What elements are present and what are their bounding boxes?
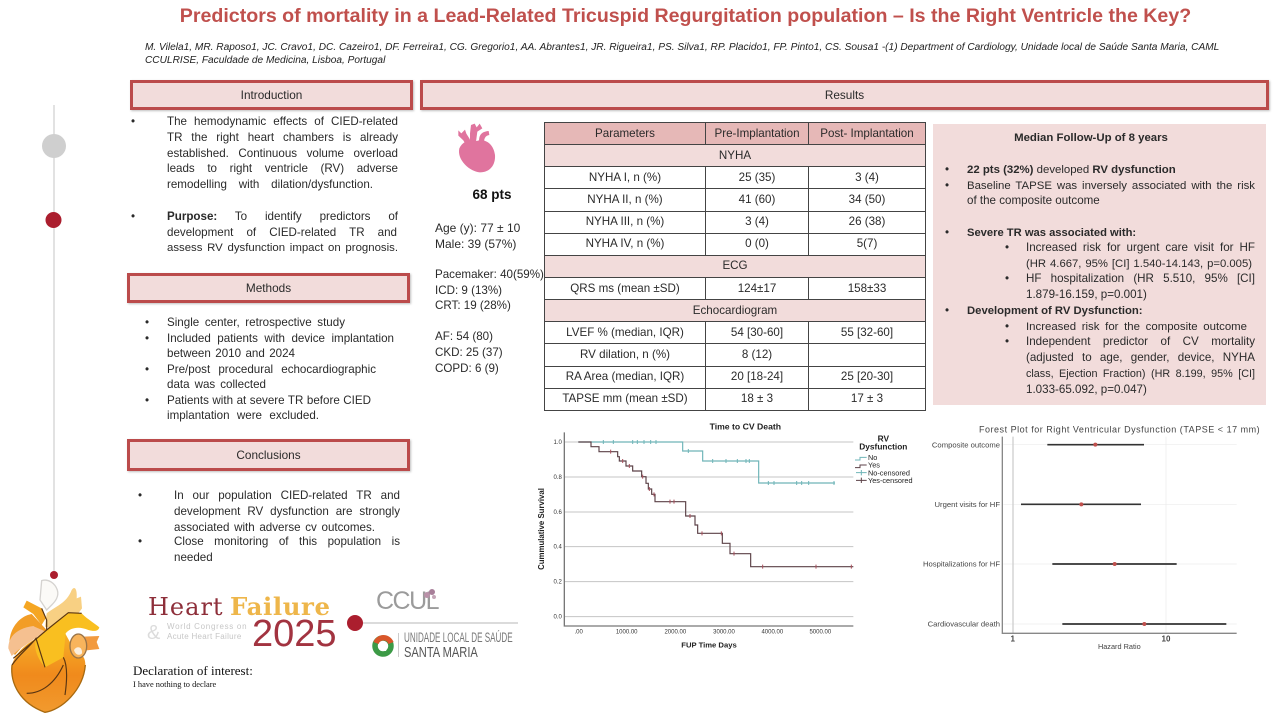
panel: baseline characteristics: Male: 39 (57%) [435,237,516,251]
panel: methods text: • [145,363,149,376]
panel: follow-up findings: Independent predictor of CV mortality [1026,335,1255,348]
y axis labels: 0.8 [553,475,562,481]
logo divider with node [347,615,518,631]
table: parameters before and after implantation: NYHA [719,149,751,162]
logo: Unidade Local de Saude Santa Maria [372,630,513,661]
table: parameters before and after implantation: 3 (4) [745,215,769,228]
x axis labels: 5000.00 [809,629,832,635]
panel: introduction text: The hemodynamic effects of CIED-related [167,115,398,128]
panel: introduction text [131,115,398,254]
panel: methods text: implantation were excluded. [167,409,319,422]
logo: Heart Failure 2025: Acute Heart Failure [167,632,242,641]
patient count: 68 pts [472,187,512,202]
logo: Heart Failure 2025: 2025 [252,613,337,655]
heading: Methods: Methods [246,281,291,295]
panel: conclusions text: development RV dysfunction are strongly [174,505,400,518]
panel: baseline characteristics: Age (y): 77 ± 10 [435,221,520,235]
y axis labels: 0.6 [553,510,562,516]
panel: follow-up findings: Increased risk for urgent care visit for HF [1026,241,1255,254]
panel: follow-up findings: Severe TR was associated with: [967,227,1136,239]
table: parameters before and after implantation: 26 (38) [849,215,885,228]
x axis labels: .00 [574,629,583,635]
table: parameters before and after implantation: 20 [18-24] [731,370,783,383]
panel: methods text: • [145,332,149,345]
x axis labels [574,629,832,635]
table: parameters before and after implantation: TAPSE mm (mean ±SD) [562,392,688,405]
panel: introduction text: • [131,210,135,223]
table: parameters before and after implantation [544,122,926,411]
panel: follow-up findings: • [1005,241,1009,254]
panel: follow-up findings: (adjusted to age, gender, device, NYHA [1026,351,1255,364]
table: parameters before and after implantation: Parameters [595,127,655,140]
icon: pink heart [458,124,496,172]
heading: Methods [127,273,410,303]
panel: follow-up findings [933,124,1266,405]
table: parameters before and after implantation: 55 [32-60] [841,326,893,339]
y axis labels: 0.4 [553,545,562,551]
chart title: Time to CV Death [710,421,781,431]
table: parameters before and after implantation: LVEF % (median, IQR) [566,326,684,339]
table: parameters before and after implantation: 124±17 [738,282,776,295]
panel: baseline characteristics: CKD: 25 (37) [435,346,503,359]
authors and affiliations: CCULRISE, Faculdade de Medicina, Lisboa, Portugal [145,55,385,66]
panel: baseline characteristics: ICD: 9 (13%) [435,284,502,297]
x axis title: FUP Time Days [681,641,737,650]
legend: No-censored [868,468,910,477]
row: composite outcome [932,440,1144,449]
y axis labels [553,440,562,621]
panel: introduction text: remodelling with dilation/dysfunction. [167,178,373,191]
declaration of interest: Declaration of interest: [133,663,253,678]
panel: follow-up findings: Development of RV Dysfunction: [967,305,1143,317]
panel: conclusions text: In our population CIED-related TR and [174,489,400,502]
logo: Heart Failure 2025: Heart [148,593,224,621]
panel: follow-up findings: Increased risk for the composite outcome [1026,321,1247,333]
panel: follow-up findings: (HR 4.667, 95% [CI] 1.540-14.143, p=0.005) [1026,258,1252,270]
panel: introduction text: established. Continuous volume overload [167,147,398,160]
legend: Dysfunction [859,441,907,451]
heading: Conclusions [127,439,410,471]
table: parameters before and after implantation: 25 (35) [739,171,775,184]
panel: introduction text: development of CIED-related TR and [167,226,397,239]
table: parameters before and after implantation: 5(7) [857,237,877,250]
heading: Introduction: Introduction [241,88,302,102]
x axis labels: 1000.00 [616,629,638,635]
panel: methods text [145,316,394,422]
panel: methods text: • [145,394,149,407]
y axis labels: 0.0 [553,615,562,621]
heading: Results [420,80,1269,110]
panel: conclusions text: • [138,535,142,548]
row: composite outcome: Composite outcome [932,440,1000,449]
panel: baseline characteristics: COPD: 6 (9) [435,362,499,375]
panel: follow-up findings: 22 pts (32%) developed RV dysfunction [967,164,1176,176]
y axis labels: 1.0 [553,440,562,446]
panel: conclusions text: Close monitoring of this population is [174,535,400,548]
chart title: Forest Plot for Right Ventricular Dysfunction (TAPSE < 17 mm) [979,425,1260,435]
illustration: anatomical heart [8,579,100,713]
table: parameters before and after implantation: Post- Implantation [820,127,914,140]
row: hospitalizations [923,560,1177,569]
authors and affiliations [145,42,1219,66]
logo: CCUL: CCUL [376,587,438,615]
panel: follow-up findings: 1.033-65.092, p=0.047) [1026,383,1147,396]
panel: baseline characteristics: Pacemaker: 40(59%) [435,268,544,281]
table: parameters before and after implantation: 18 ± 3 [741,392,773,405]
row: cardiovascular death [928,620,1226,629]
panel: methods text: Patients with at severe TR before CIED [167,394,371,407]
y axis labels: 0.2 [553,580,562,586]
panel: follow-up findings: • [945,179,949,192]
panel: follow-up findings: • [945,163,949,176]
heading: Introduction [130,80,413,110]
panel: conclusions text: • [138,489,142,502]
panel: follow-up findings: • [1005,335,1009,348]
panel: follow-up findings: • [945,304,949,317]
panel: follow-up findings: Median Follow-Up of 8 years [1014,132,1168,144]
table: parameters before and after implantation: RA Area (median, IQR) [566,370,684,383]
panel: methods text: Pre/post procedural echocardiographic [167,363,376,376]
table: parameters before and after implantation: NYHA III, n (%) [586,215,664,228]
decorative timeline with nodes [42,105,66,579]
legend: Yes [868,461,880,470]
panel: methods text: Included patients with device implantation [167,332,394,345]
legend: No [868,453,877,462]
table: parameters before and after implantation: NYHA IV, n (%) [586,237,664,250]
x axis labels [1010,635,1171,651]
logo: Heart Failure 2025: & [147,622,160,644]
table: parameters before and after implantation: RV dilation, n (%) [580,348,670,361]
table: parameters before and after implantation: Pre-Implantation [714,127,800,140]
panel: methods text: • [145,316,149,329]
panel: methods text: Single center, retrospective study [167,316,345,329]
logo: Heart Failure 2025: World Congress on [167,622,247,631]
table: parameters before and after implantation: 0 (0) [745,237,769,250]
x axis labels: Hazard Ratio [1098,642,1141,651]
logo: Unidade Local de Saude Santa Maria: UNIDADE LOCAL DE SAÚDE [404,630,513,645]
logo: Heart Failure 2025: Failure [230,592,331,621]
x axis labels: 1 [1010,635,1015,644]
table: parameters before and after implantation: 158±33 [848,282,886,295]
declaration of interest: I have nothing to declare [133,680,216,689]
panel: follow-up findings: • [1005,272,1009,285]
table: parameters before and after implantation: 25 [20-30] [841,370,893,383]
panel: conclusions text: associated with adverse cv outcomes. [174,521,375,534]
heading: Results: Results [825,88,864,102]
table: parameters before and after implantation: 3 (4) [855,171,879,184]
x axis labels: 2000.00 [664,629,687,635]
table: parameters before and after implantation: 41 (60) [739,193,775,206]
legend: RV [878,434,889,444]
panel: baseline characteristics: CRT: 19 (28%) [435,299,511,312]
panel: methods text: data was collected [167,378,266,391]
table: parameters before and after implantation: NYHA II, n (%) [587,193,663,206]
row: cardiovascular death: Cardiovascular death [928,620,1000,629]
table: parameters before and after implantation: 8 (12) [742,348,772,361]
panel: conclusions text [138,489,400,564]
row: urgent visits: Urgent visits for HF [934,500,1000,509]
legend: Yes-censored [868,476,913,485]
table: parameters before and after implantation: 54 [30-60] [731,326,783,339]
panel: introduction text: leads to right ventricle (RV) adverse [167,162,398,175]
heading: Conclusions: Conclusions [236,448,301,462]
x axis labels: 3000.00 [713,629,736,635]
legend [855,434,913,485]
declaration of interest [133,663,253,689]
panel: follow-up findings: 1.879-16.159, p=0.001) [1026,288,1147,301]
panel: introduction text: TR the right heart chambers is already [167,131,398,144]
x axis labels: 4000.00 [761,629,784,635]
row: urgent visits [934,500,1141,509]
panel: introduction text: • [131,115,135,128]
panel: baseline characteristics: AF: 54 (80) [435,330,493,343]
panel: methods text: between 2010 and 2024 [167,347,295,360]
authors and affiliations: M. Vilela1, MR. Raposo1, JC. Cravo1, DC. Cazeiro1, DF. Ferreira1, CG. Gregorio1, AA. Abrantes1, JR. Rigueira1, PS. Silva1, RP. Placido1, FP. Pinto1, CS. Sousa1 -(1) Department of Cardiology, Unidade local de Saúde Santa Maria, CAML [145,42,1219,53]
panel: baseline characteristics [435,221,544,375]
y axis title: Cummulative Survival [537,488,546,570]
chart: forest plot [923,425,1260,651]
panel: follow-up findings: class, Ejection Fraction) (HR 8.199, 95% [CI] [1026,368,1255,380]
panel: conclusions text: needed [174,551,213,564]
logo: Heart Failure 2025 [147,592,337,655]
panel: follow-up findings: Baseline TAPSE was inversely associated with the risk [967,180,1255,192]
panel: introduction text: Purpose: To identify predictors of [167,210,398,223]
logo: Unidade Local de Saude Santa Maria: SANTA MARIA [404,644,478,661]
chart: Kaplan-Meier survival [537,421,913,650]
x axis labels: 10 [1162,635,1171,644]
panel: follow-up findings: HF hospitalization (HR 5.510, 95% [CI] [1026,272,1255,285]
title: Predictors of mortality in a Lead-Related Tricuspid Regurgitation population – Is the Right Ventricle the Key? [180,5,1191,27]
table: parameters before and after implantation: ECG [722,259,748,272]
table: parameters before and after implantation: QRS ms (mean ±SD) [570,282,680,295]
panel: introduction text: assess RV dysfunction impact on prognosis. [167,242,398,254]
table: parameters before and after implantation: 17 ± 3 [851,392,883,405]
table: parameters before and after implantation: NYHA I, n (%) [589,171,661,184]
row: hospitalizations: Hospitalizations for HF [923,560,1000,569]
panel: follow-up findings: • [1005,320,1009,333]
table: parameters before and after implantation: Echocardiogram [693,304,777,317]
panel: follow-up findings: of the composite outcome [967,194,1100,207]
table: parameters before and after implantation: 34 (50) [849,193,885,206]
panel: follow-up findings: • [945,226,949,239]
